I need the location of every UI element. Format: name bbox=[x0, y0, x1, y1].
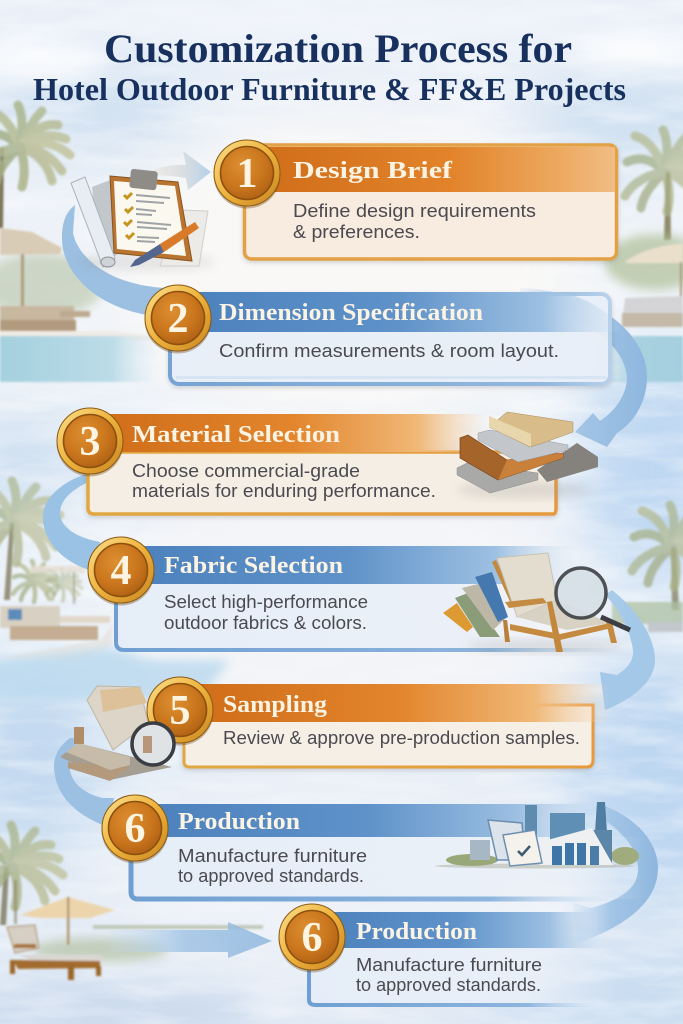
step 2 header band bbox=[172, 292, 625, 332]
arrow: start into step 1 bbox=[143, 151, 211, 190]
step 1 description bbox=[293, 200, 536, 242]
title: Hotel Outdoor Furniture & FF&E Projects bbox=[33, 71, 626, 107]
step 1 card body bbox=[244, 145, 616, 259]
step 3 description bbox=[132, 460, 436, 501]
step 4 badge bbox=[88, 537, 154, 606]
panel: step 2 dimension specification bbox=[144, 285, 625, 384]
step 1 heading: Design Brief bbox=[293, 158, 453, 184]
icon: factory buildings with approval document bbox=[435, 802, 639, 868]
scenery: middle left palms, lounge and pool bbox=[0, 481, 230, 700]
step 4 heading: Fabric Selection bbox=[164, 553, 343, 579]
step 3 heading: Material Selection bbox=[132, 422, 340, 448]
step 3 badge: 3 bbox=[80, 419, 100, 465]
step 5 badge: 5 bbox=[170, 688, 190, 734]
step 4 description bbox=[164, 591, 368, 633]
final step description: Manufacture furniture bbox=[356, 954, 542, 975]
step 1 description: Define design requirements bbox=[293, 200, 536, 221]
panel: step 5 sampling bbox=[146, 677, 611, 767]
step 6 card body bbox=[131, 830, 645, 899]
step 4 card body bbox=[116, 570, 630, 650]
step 6 header band bbox=[133, 804, 603, 837]
final step heading: Production bbox=[356, 919, 477, 945]
icon: armchair with fabric swatches and magnifier bbox=[443, 553, 630, 652]
final step description: to approved standards. bbox=[356, 974, 541, 995]
step 3 header band bbox=[90, 414, 490, 452]
final step card body bbox=[309, 945, 620, 1006]
icon: lounge chair sample with magnifier bbox=[60, 686, 174, 781]
final step header band bbox=[312, 912, 602, 948]
final step badge: 6 bbox=[302, 915, 322, 961]
step 5 card body bbox=[184, 705, 593, 767]
scenery: top left palm, cabana and pool bbox=[0, 105, 170, 382]
step 1 badge bbox=[214, 140, 280, 208]
panel: step 1 design brief bbox=[214, 140, 616, 259]
step 3 card body bbox=[88, 442, 556, 514]
step 5 heading: Sampling bbox=[223, 692, 327, 718]
step 5 description: Review & approve pre-production samples. bbox=[223, 727, 580, 748]
step 2 badge bbox=[144, 285, 212, 354]
arrow: step 2 to step 3 bbox=[520, 288, 647, 447]
step 4 badge: 4 bbox=[110, 548, 132, 594]
arrow: step 1 to step 2 bbox=[62, 205, 170, 315]
scenery: middle right palm and deck bbox=[612, 505, 683, 632]
step 1 badge: 1 bbox=[236, 151, 258, 197]
step 3 description: materials for enduring performance. bbox=[132, 480, 436, 501]
step 5 header band bbox=[186, 684, 611, 722]
arrow: step 5 to step 6 bbox=[54, 738, 114, 827]
step 4 description: outdoor fabrics & colors. bbox=[164, 612, 367, 633]
step 1 description: & preferences. bbox=[293, 221, 420, 242]
step 6 badge bbox=[102, 795, 168, 864]
arrow: into final step bbox=[110, 922, 272, 958]
step 6 description: Manufacture furniture bbox=[178, 845, 367, 866]
step 6 heading: Production bbox=[178, 809, 300, 835]
icon: material samples stack bbox=[457, 412, 598, 498]
step 6 badge: 6 bbox=[124, 806, 146, 852]
arrow: step 3 to step 4 bbox=[43, 474, 100, 572]
panel: final step production bbox=[278, 904, 620, 1006]
icon: clipboard with blueprint and pen bbox=[71, 169, 215, 271]
scenery: top right palm, umbrella and pool bbox=[590, 130, 683, 382]
arrow: step 4 to step 5 bbox=[600, 590, 655, 710]
step 2 card body bbox=[170, 294, 610, 384]
final step badge bbox=[278, 904, 346, 972]
step 4 header band bbox=[118, 546, 578, 584]
panel: step 4 fabric selection bbox=[88, 537, 630, 650]
step 6 description: to approved standards. bbox=[178, 865, 364, 886]
step 3 badge bbox=[56, 408, 124, 476]
step 6 description bbox=[178, 845, 367, 886]
step 5 badge bbox=[146, 677, 214, 746]
panel: step 6 production bbox=[102, 795, 645, 899]
step 2 heading: Dimension Specification bbox=[219, 300, 483, 326]
step 4 description: Select high-performance bbox=[164, 591, 368, 612]
panel: step 3 material selection bbox=[56, 408, 556, 514]
scenery: bottom left palm, umbrella, lounger and lagoon bbox=[0, 825, 263, 980]
arrow: step 6 to final step bbox=[572, 806, 658, 943]
final step description bbox=[356, 954, 542, 995]
title: Customization Process for bbox=[104, 26, 572, 71]
step 3 description: Choose commercial-grade bbox=[132, 460, 360, 481]
step 1 header band bbox=[246, 147, 615, 192]
step 2 badge: 2 bbox=[168, 296, 188, 342]
title bbox=[33, 26, 626, 107]
step 2 description: Confirm measurements & room layout. bbox=[219, 340, 559, 361]
